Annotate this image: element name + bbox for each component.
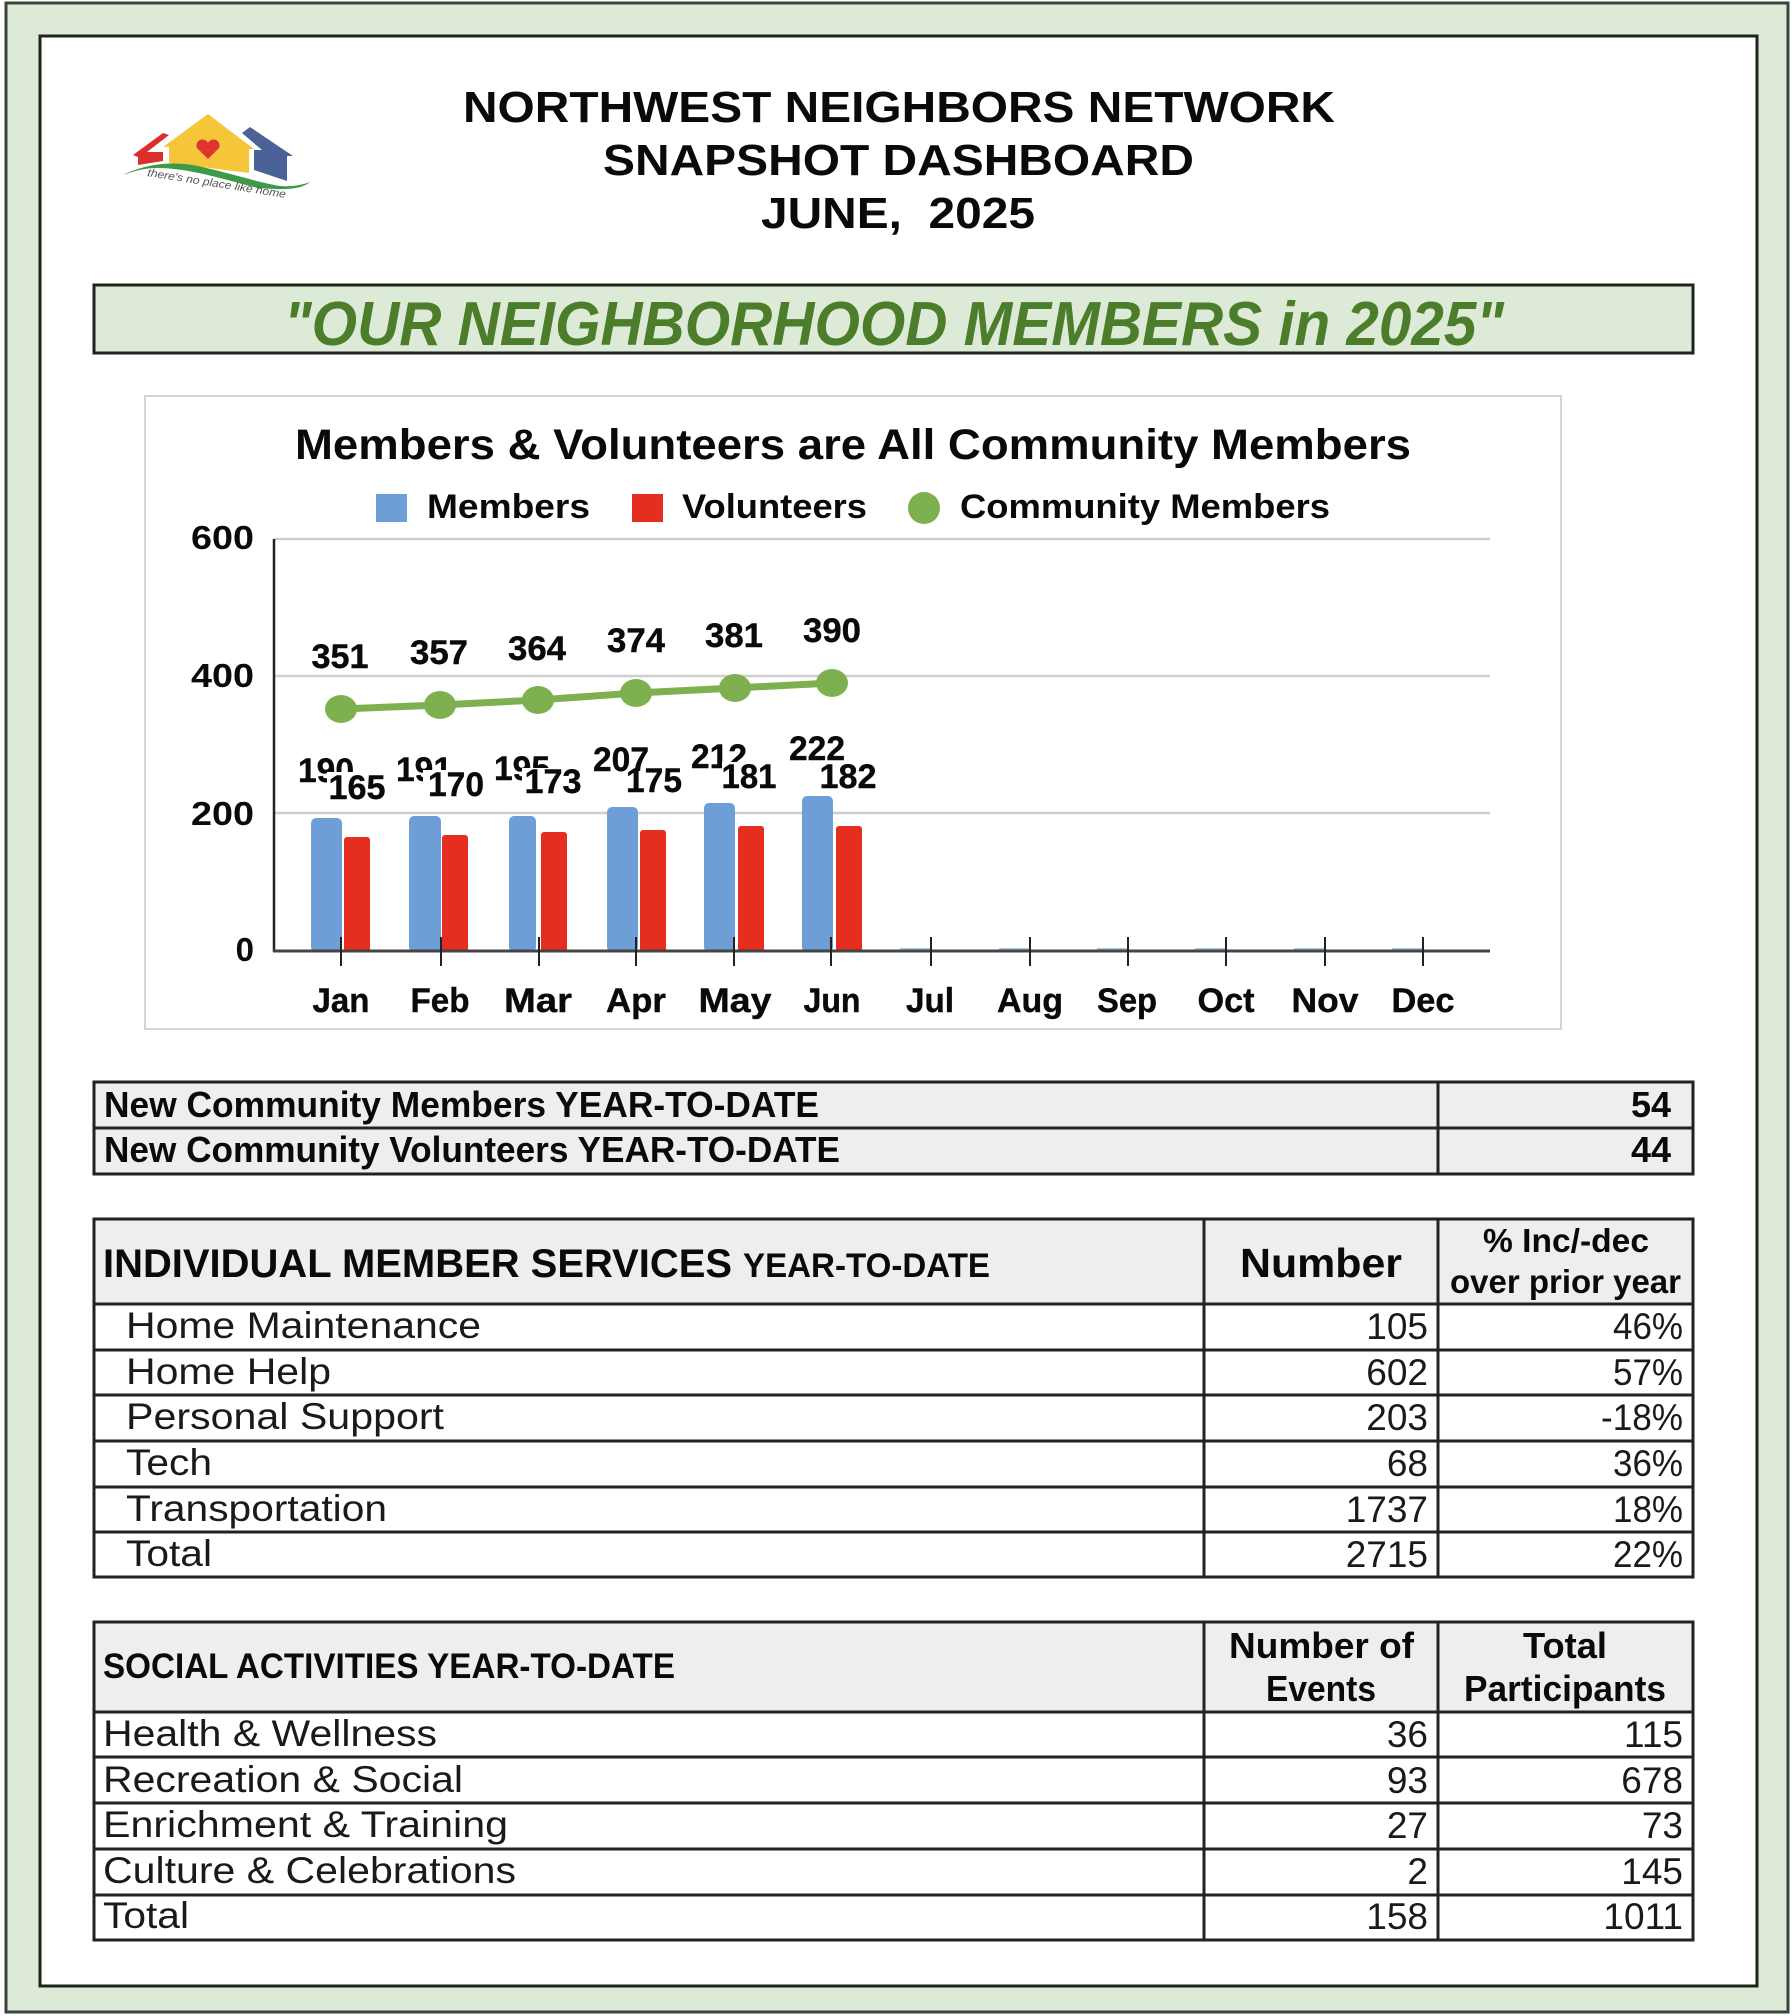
rows: 602 — [1366, 1352, 1428, 1393]
rows: 22% — [1613, 1534, 1683, 1575]
rows: 158 — [1366, 1896, 1428, 1937]
member data labels: 212 — [691, 738, 747, 776]
volunteer data labels: 165 — [328, 769, 386, 807]
month labels: Oct — [1198, 982, 1254, 1020]
table header: Total — [1523, 1625, 1607, 1666]
month labels: Jul — [906, 982, 954, 1020]
community data labels: 374 — [607, 622, 665, 660]
rows: Health & Wellness — [103, 1713, 437, 1754]
rows: Home Maintenance — [126, 1305, 481, 1346]
table header — [103, 1222, 1681, 1300]
rows: 2 — [1407, 1851, 1428, 1892]
rows: 145 — [1621, 1851, 1683, 1892]
members bars — [311, 796, 1422, 952]
table header: Events — [1266, 1668, 1376, 1709]
rows: 36% — [1613, 1443, 1683, 1484]
table header: Number of — [1229, 1625, 1415, 1666]
table: social activities — [94, 1622, 1693, 1940]
month labels: Apr — [606, 982, 666, 1020]
legend: Volunteers — [682, 488, 867, 526]
table: year-to-date new members: 54 — [1631, 1084, 1671, 1125]
rows: 203 — [1366, 1397, 1428, 1438]
y axis labels: 0 — [236, 931, 254, 968]
table header: SOCIAL ACTIVITIES YEAR-TO-DATE — [103, 1647, 675, 1686]
rows: 93 — [1387, 1760, 1428, 1801]
rows: Total — [126, 1533, 212, 1574]
banner: our neighborhood members: "OUR NEIGHBORHOOD MEMBERS in 2025" — [284, 290, 1506, 359]
y axis labels: 200 — [191, 795, 254, 832]
table header: YEAR-TO-DATE — [743, 1247, 990, 1285]
rows: 1011 — [1603, 1896, 1683, 1937]
table header: over prior year — [1450, 1263, 1681, 1300]
y axis labels: 400 — [191, 657, 254, 694]
rows: 115 — [1624, 1714, 1683, 1755]
month labels: Aug — [997, 982, 1063, 1020]
title — [463, 83, 1335, 238]
volunteers bars — [344, 826, 862, 952]
rows: Culture & Celebrations — [103, 1850, 516, 1891]
legend — [376, 488, 1330, 526]
table header — [103, 1625, 1666, 1709]
panel: chart — [145, 396, 1561, 1029]
month labels: May — [698, 982, 772, 1020]
community members line — [325, 669, 848, 723]
x axis — [273, 539, 1490, 966]
volunteer data labels — [327, 758, 876, 807]
rows: Personal Support — [126, 1396, 445, 1437]
rows: Total — [103, 1895, 189, 1936]
table header: INDIVIDUAL MEMBER SERVICES — [103, 1242, 732, 1286]
community data labels: 364 — [508, 630, 566, 668]
volunteer data labels: 175 — [626, 762, 682, 800]
volunteer data labels: 181 — [722, 758, 776, 796]
table header: Number — [1240, 1240, 1402, 1286]
table: year-to-date new members: New Community Volunteers YEAR-TO-DATE — [104, 1129, 840, 1170]
member data labels — [298, 730, 845, 790]
rows: -18% — [1601, 1397, 1683, 1438]
rows: 68 — [1387, 1443, 1428, 1484]
y axis labels — [191, 519, 254, 968]
rows: 105 — [1366, 1306, 1428, 1347]
community data labels: 381 — [705, 617, 763, 655]
rows: 46% — [1613, 1306, 1683, 1347]
month labels: Sep — [1097, 982, 1157, 1020]
rows — [103, 1713, 1683, 1937]
community data labels: 357 — [410, 634, 468, 672]
rows: Home Help — [126, 1351, 331, 1392]
logo: there's no place like home — [147, 167, 287, 201]
rows: Enrichment & Training — [103, 1804, 508, 1845]
logo — [123, 114, 310, 201]
member data labels: 195 — [494, 750, 550, 788]
table: year-to-date new members — [94, 1082, 1693, 1174]
month labels — [312, 982, 1454, 1020]
table: year-to-date new members: New Community Members YEAR-TO-DATE — [104, 1084, 819, 1125]
member data labels: 222 — [789, 730, 845, 768]
table header: Participants — [1464, 1668, 1666, 1709]
community data labels: 351 — [312, 638, 368, 676]
community data labels — [312, 612, 861, 676]
rows: 18% — [1613, 1489, 1683, 1530]
month labels: Jun — [804, 982, 860, 1020]
legend: Members — [427, 488, 590, 526]
chart title: Members & Volunteers are All Community Members — [295, 421, 1411, 469]
month labels: Feb — [410, 982, 470, 1020]
rows: 1737 — [1346, 1489, 1428, 1530]
member data labels: 190 — [298, 752, 354, 790]
month labels: Dec — [1392, 982, 1454, 1020]
rows: 57% — [1613, 1352, 1683, 1393]
month labels: Jan — [312, 982, 370, 1020]
rows — [126, 1305, 1683, 1575]
volunteer data labels: 182 — [820, 758, 876, 796]
member data labels: 191 — [396, 751, 452, 789]
rows: 2715 — [1346, 1534, 1428, 1575]
rows: 36 — [1387, 1714, 1428, 1755]
rows: Tech — [126, 1442, 212, 1483]
title: JUNE, 2025 — [761, 189, 1035, 238]
month labels: Nov — [1292, 982, 1359, 1020]
table header: % Inc/-dec — [1483, 1222, 1649, 1259]
volunteer data labels: 170 — [428, 766, 484, 804]
title: NORTHWEST NEIGHBORS NETWORK — [463, 83, 1335, 132]
rows: 73 — [1642, 1805, 1683, 1846]
community data labels: 390 — [803, 612, 861, 650]
rows: Recreation & Social — [103, 1759, 463, 1800]
volunteer data labels: 173 — [524, 763, 582, 801]
table: year-to-date new members: 44 — [1631, 1129, 1671, 1170]
member data labels: 207 — [593, 741, 649, 779]
rows: 678 — [1621, 1760, 1683, 1801]
y axis labels: 600 — [191, 519, 254, 556]
table: individual member services — [94, 1219, 1693, 1577]
title: SNAPSHOT DASHBOARD — [603, 136, 1194, 185]
rows: 27 — [1387, 1805, 1428, 1846]
rows: Transportation — [126, 1488, 387, 1529]
month labels: Mar — [504, 982, 572, 1020]
legend: Community Members — [960, 488, 1330, 526]
